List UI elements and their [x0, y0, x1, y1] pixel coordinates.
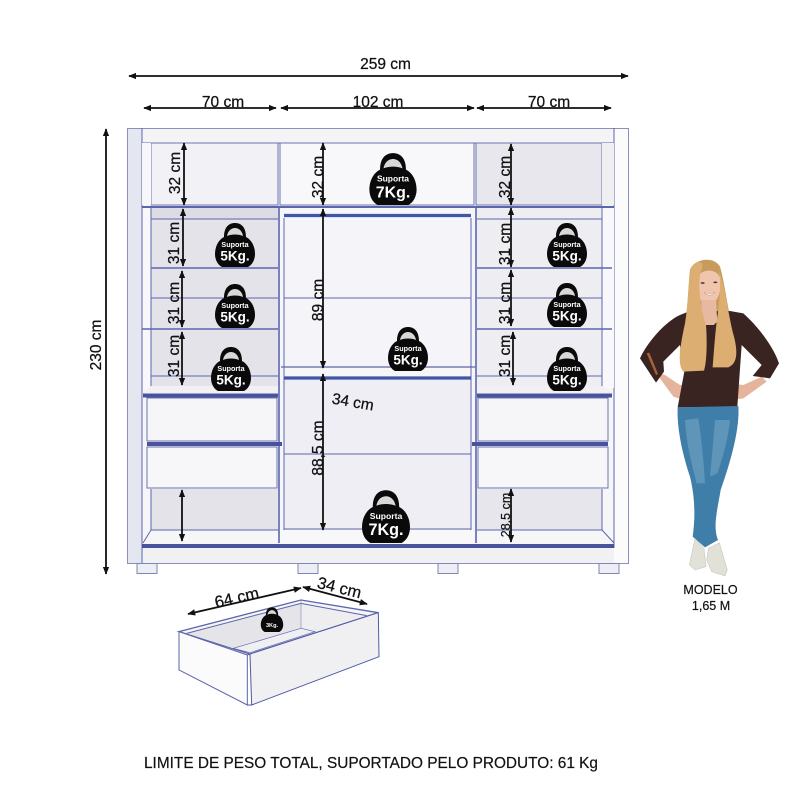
weight icon: right lower 5 kg: Suporta [553, 364, 582, 373]
right column vertical dimensions: 32 cm [497, 156, 514, 198]
center column vertical dimensions: 89 cm [310, 279, 327, 321]
weight icon: center 5 kg: Suporta [394, 344, 423, 353]
shirt [640, 311, 779, 407]
top compartments [142, 143, 614, 207]
hair back [680, 260, 737, 372]
weight icon: top center 7 kg: 7Kg. [376, 184, 410, 201]
forearms and hands [655, 372, 767, 401]
weight icon: right middle 5 kg: 5Kg. [552, 308, 582, 324]
left module width [144, 94, 276, 111]
wardrobe body [128, 128, 628, 564]
weight icon: left middle 5 kg [215, 284, 255, 328]
right module width [477, 94, 611, 111]
neck [701, 300, 717, 330]
weight icon: left middle 5 kg: Suporta [221, 301, 250, 310]
weight icon: right upper 5 kg: 5Kg. [552, 248, 582, 264]
overall height dimension: 230 cm [88, 320, 105, 370]
weight icon: right middle 5 kg: Suporta [553, 300, 582, 309]
weight icon: right upper 5 kg: Suporta [553, 240, 582, 249]
center column vertical dimensions [310, 143, 327, 530]
center hanging compartment [279, 207, 476, 543]
hair front [680, 262, 707, 372]
weight icon: left middle 5 kg: 5Kg. [220, 310, 250, 324]
right column vertical dimensions [497, 144, 514, 542]
right column vertical dimensions: 31 cm [497, 223, 514, 265]
left column vertical dimensions: 31 cm [166, 222, 183, 264]
left column vertical dimensions: 32 cm [167, 152, 184, 194]
smile [704, 292, 715, 295]
model caption [683, 583, 738, 613]
right drawers [472, 396, 612, 488]
total weight limit note: LIMITE DE PESO TOTAL, SUPORTADO PELO PRODUTO: 61 Kg [144, 755, 598, 772]
weight icon: left upper 5 kg [215, 223, 255, 267]
right shelves [477, 208, 614, 393]
weight icon: right upper 5 kg [547, 223, 587, 267]
jeans highlights [685, 418, 705, 483]
drawer weight icon 3 kg [261, 607, 283, 632]
weight icon: bottom center 7 kg: 7Kg. [368, 521, 404, 539]
weight icon: left lower 5 kg: 5Kg. [216, 372, 246, 388]
drawer width dimension: 64 cm [213, 584, 261, 612]
center column vertical dimensions: 32 cm [310, 156, 327, 198]
left shelves [142, 208, 278, 393]
open drawer illustration [179, 600, 379, 705]
weight icon: right lower 5 kg [547, 347, 587, 391]
weight icon: center 5 kg [388, 327, 428, 371]
drawer weight icon 3 kg: 3Kg. [266, 623, 279, 629]
depth label: 34 cm [331, 391, 375, 415]
shirt neckline [706, 325, 716, 367]
weight icon: bottom center 7 kg [362, 490, 410, 543]
right column vertical dimensions: 28,5 cm [499, 493, 513, 537]
left drawers [143, 396, 282, 488]
weight icon: left upper 5 kg: 5Kg. [220, 248, 250, 264]
right column vertical dimensions: 31 cm [497, 282, 514, 324]
weight icon: top center 7 kg: Suporta [377, 173, 409, 183]
model caption: 1,65 M [692, 599, 730, 613]
right module width: 70 cm [528, 94, 570, 111]
right column vertical dimensions: 31 cm [497, 335, 514, 377]
weight icon: right lower 5 kg: 5Kg. [552, 372, 582, 388]
overall width dimension: 259 cm [360, 56, 411, 73]
weight icon: left upper 5 kg: Suporta [221, 240, 250, 249]
weight icon: bottom center 7 kg: Suporta [370, 511, 402, 521]
weight icon: left lower 5 kg [211, 347, 251, 391]
model caption: MODELO [683, 583, 738, 597]
weight icon: center 5 kg: 5Kg. [393, 352, 423, 368]
left column vertical dimensions: 31 cm [166, 335, 183, 377]
lower open compartments [142, 489, 614, 546]
face [697, 271, 721, 305]
left column vertical dimensions [166, 143, 184, 541]
sneakers [689, 538, 727, 576]
left module width: 70 cm [202, 94, 244, 111]
model figure [640, 260, 779, 576]
weight icon: top center 7 kg [369, 153, 417, 205]
left column vertical dimensions: 31 cm [166, 282, 183, 324]
center column vertical dimensions: 88,5 cm [310, 420, 327, 476]
eyes [701, 281, 717, 284]
weight icon: right middle 5 kg [547, 283, 587, 327]
sleeve detail [647, 353, 658, 375]
jeans [678, 406, 739, 547]
center module width: 102 cm [353, 94, 403, 111]
drawer depth dimension: 34 cm [315, 574, 363, 602]
drawer width dimension [188, 584, 301, 614]
weight icon: left lower 5 kg: Suporta [217, 364, 246, 373]
wardrobe feet [137, 564, 619, 574]
